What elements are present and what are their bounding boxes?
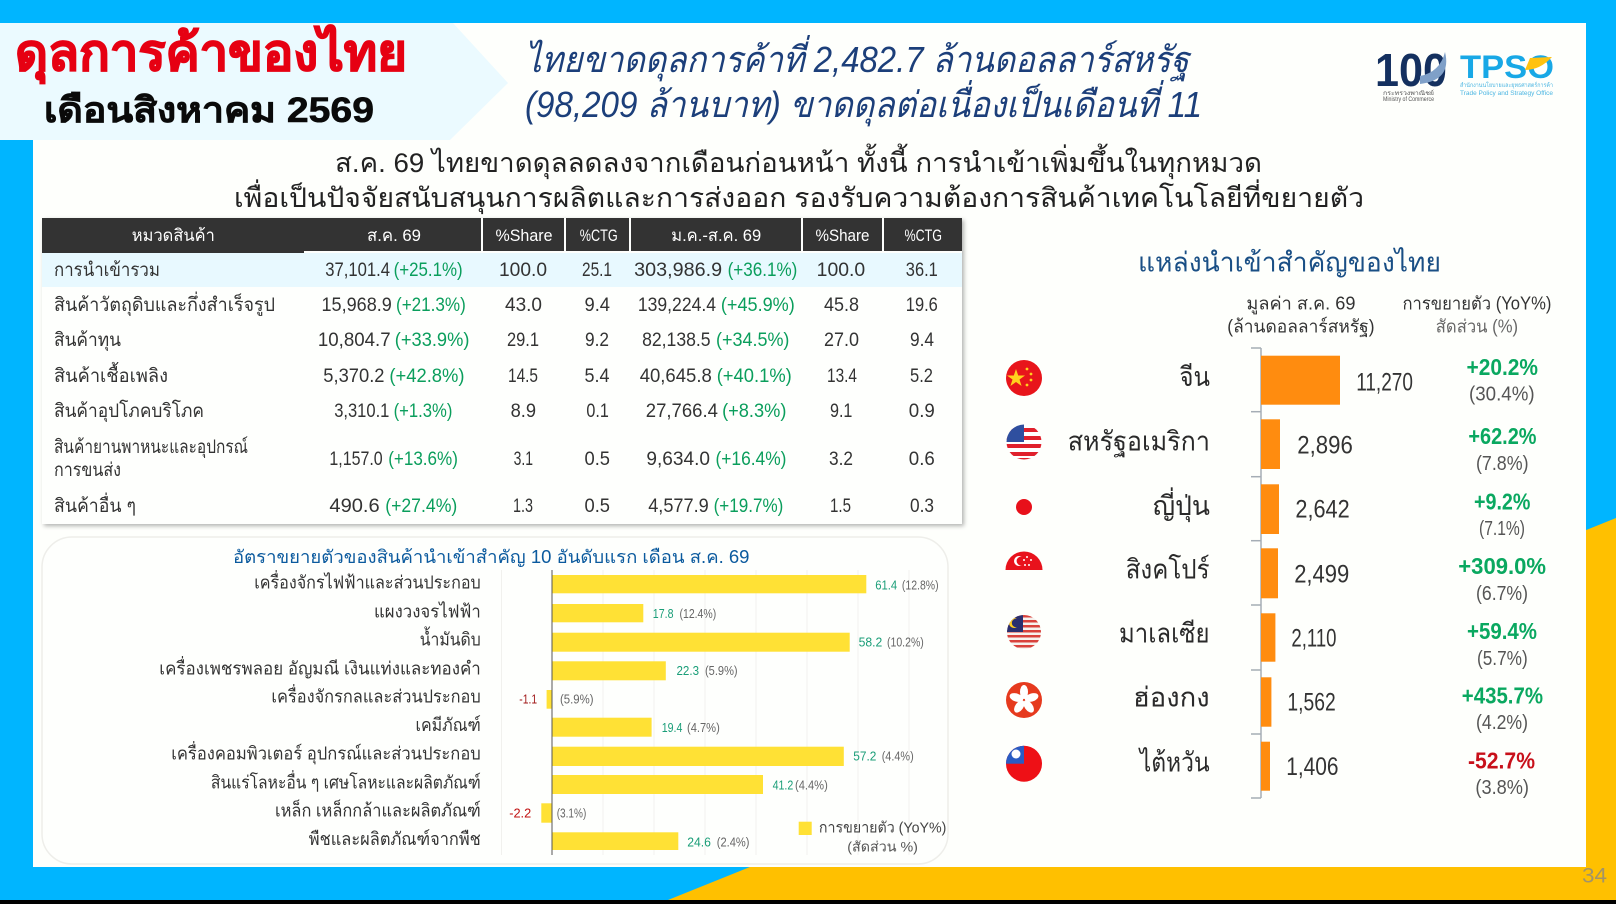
- row: total imports: 25.1: [582, 260, 612, 281]
- row: fuel: (+40.1%): [717, 366, 792, 387]
- row: consumer goods: สินค้าอุปโภคบริโภค: [54, 399, 204, 423]
- row: capital goods: 10,804.7: [318, 330, 391, 351]
- row: raw materials: สินค้าวัตถุดิบและกึ่งสำเร็จรูป: [54, 291, 275, 317]
- row: other goods: 1.3: [513, 496, 533, 517]
- row: United States: [1006, 419, 1536, 475]
- bar: metal ores and scrap: 41.2: [773, 777, 793, 792]
- row: Singapore: +309.0%: [1458, 553, 1546, 579]
- table header: %Share: [496, 226, 552, 245]
- logos: [1375, 44, 1554, 103]
- icon: China flag: [1006, 360, 1042, 396]
- row: raw materials: [54, 291, 938, 317]
- table header: %CTG: [904, 226, 942, 245]
- row: other goods: 4,577.9: [648, 496, 709, 517]
- icon: Hong Kong flag: [1006, 682, 1042, 718]
- row: capital goods: 9.4: [910, 330, 934, 351]
- row: other goods: 1.5: [830, 496, 851, 517]
- row: fuel: 14.5: [508, 366, 538, 387]
- row: Taiwan: ไต้หวัน: [1138, 748, 1210, 778]
- row: United States: (7.8%): [1476, 453, 1528, 475]
- table header: ม.ค.-ส.ค. 69: [671, 226, 761, 245]
- bar: electrical machinery: เครื่องจักรไฟฟ้าและส่วนประกอบ: [254, 569, 481, 592]
- row: consumer goods: 3,310.1: [334, 401, 389, 422]
- row: consumer goods: 27,766.4: [646, 401, 718, 422]
- table background: [42, 218, 962, 524]
- row: Taiwan: -52.7%: [1468, 747, 1535, 773]
- title: เดือนสิงหาคม 2569: [44, 91, 374, 130]
- table header: %Share: [816, 226, 870, 245]
- bar: jewellery and gold: [159, 655, 738, 680]
- bar: computers: (4.4%): [882, 749, 914, 764]
- bar: machinery: (5.9%): [560, 691, 594, 706]
- row: China: (30.4%): [1469, 384, 1535, 406]
- table header: หมวดสินค้า: [132, 226, 215, 245]
- page number: 34: [1582, 865, 1607, 888]
- row: vehicles and transport equipment: 3.1: [514, 449, 533, 470]
- chart legend: (สัดส่วน %): [847, 839, 918, 855]
- bar: machinery: [271, 684, 594, 709]
- row: capital goods: 82,138.5: [642, 330, 711, 351]
- bar: electrical machinery: 61.4: [875, 577, 897, 592]
- row: capital goods: 27.0: [824, 330, 859, 351]
- row: total imports: 37,101.4: [325, 260, 390, 281]
- row: Hong Kong: 1,562: [1287, 689, 1336, 717]
- bar: integrated circuits: (12.4%): [680, 606, 716, 621]
- row: other goods: สินค้าอื่น ๆ: [54, 492, 136, 517]
- row: capital goods: (+33.9%): [395, 330, 469, 351]
- bar: metal ores and scrap: สินแร่โลหะอื่น ๆ เศษโลหะและผลิตภัณฑ์: [211, 769, 481, 792]
- row: raw materials: 15,968.9: [322, 295, 392, 316]
- title: [15, 24, 407, 130]
- row: Japan: +9.2%: [1474, 488, 1530, 514]
- bar: computers: [171, 740, 914, 766]
- background: black bottom bar: [0, 900, 1616, 904]
- bar: machinery: เครื่องจักรกลและส่วนประกอบ: [271, 684, 481, 707]
- row: Singapore: 2,499: [1294, 561, 1349, 589]
- row: Hong Kong: [1006, 677, 1543, 734]
- row: raw materials: 43.0: [505, 295, 542, 316]
- row: Singapore: (6.7%): [1476, 583, 1528, 605]
- row: China: [1006, 354, 1538, 406]
- row: capital goods: 9.2: [585, 330, 609, 351]
- bar: integrated circuits: แผงวงจรไฟฟ้า: [374, 600, 481, 621]
- bar: chemicals: เคมีภัณฑ์: [416, 715, 481, 735]
- row: consumer goods: [54, 399, 935, 423]
- row: Singapore: [1006, 548, 1546, 605]
- headline: (98,209 ล้านบาท) ขาดดุลต่อเนื่องเป็นเดือนที่ 11: [525, 79, 1202, 127]
- row: vehicles and transport equipment: สินค้ายานพาหนะและอุปกรณ์: [54, 436, 248, 459]
- panel: import sources: [1005, 248, 1551, 799]
- row: Hong Kong: (4.2%): [1476, 712, 1528, 734]
- bar: iron and steel: เหล็ก เหล็กกล้าและผลิตภัณฑ์: [275, 799, 481, 821]
- row: fuel: [54, 362, 933, 387]
- row: consumer goods: (+8.3%): [722, 401, 786, 422]
- logo: TPSO: TPSO: [1460, 49, 1554, 85]
- row: total imports: (+25.1%): [394, 260, 463, 281]
- icon: US flag: [1006, 424, 1042, 460]
- bar: metal ores and scrap: [211, 769, 828, 794]
- logo: TPSO: สำนักงานนโยบายและยุทธศาสตร์การค้า: [1460, 81, 1553, 89]
- panel heading: แหล่งนำเข้าสำคัญของไทย: [1138, 248, 1441, 278]
- title: ดุลการค้าของไทย: [15, 24, 407, 84]
- bar: electrical machinery: [254, 569, 939, 593]
- row: Malaysia: 2,110: [1291, 625, 1336, 653]
- row: total imports: 303,986.9: [634, 260, 722, 281]
- bar: integrated circuits: [374, 600, 716, 622]
- row: consumer goods: 9.1: [830, 401, 852, 422]
- row: Japan: ญี่ปุ่น: [1153, 487, 1210, 523]
- row: raw materials: 139,224.4: [638, 295, 716, 316]
- bar: chemicals: 19.4: [662, 720, 682, 735]
- row: United States: +62.2%: [1468, 423, 1536, 449]
- row: vehicles and transport equipment: 1,157.0: [329, 449, 383, 470]
- row: total imports: 100.0: [817, 260, 865, 281]
- axis and ticks: [1251, 348, 1261, 798]
- row: total imports: การนำเข้ารวม: [54, 260, 160, 281]
- row: Japan: 2,642: [1295, 495, 1350, 523]
- row: Malaysia: +59.4%: [1467, 618, 1537, 644]
- row: fuel: สินค้าเชื้อเพลิง: [54, 362, 168, 387]
- bar: machinery: -1.1: [519, 691, 537, 706]
- row: Malaysia: (5.7%): [1477, 648, 1528, 670]
- bar: iron and steel: -2.2: [509, 806, 531, 821]
- logo: Ministry of Commerce 100: Ministry of Commerce: [1383, 97, 1435, 103]
- row: total imports: (+36.1%): [728, 260, 797, 281]
- bar: computers: เครื่องคอมพิวเตอร์ อุปกรณ์และส่วนประกอบ: [171, 740, 481, 764]
- panel: top-10 import growth chart: [42, 537, 948, 864]
- row: Taiwan: 1,406: [1286, 753, 1338, 781]
- row: Malaysia: [1006, 613, 1537, 670]
- row: fuel: 40,645.8: [640, 366, 712, 387]
- bar: crude oil: น้ำมันดิบ: [420, 627, 481, 650]
- table header: %CTG: [580, 226, 618, 245]
- logo: Ministry of Commerce 100: กระทรวงพาณิชย์: [1383, 89, 1434, 97]
- row: fuel: 5,370.2: [323, 366, 384, 387]
- bar: metal ores and scrap: (4.4%): [795, 777, 828, 792]
- row: other goods: [54, 492, 934, 517]
- row: consumer goods: 0.1: [586, 401, 609, 422]
- bar: chemicals: [416, 715, 720, 737]
- subheading: ส.ค. 69 ไทยขาดดุลลดลงจากเดือนก่อนหน้า ทั้งนี้ การนำเข้าเพิ่มขึ้นในทุกหมวด: [335, 143, 1262, 180]
- row: capital goods: [54, 330, 934, 352]
- row: other goods: 490.6: [329, 496, 380, 517]
- column heading: value: [1227, 293, 1375, 337]
- column heading: growth: [1402, 293, 1551, 336]
- row: United States: สหรัฐอเมริกา: [1068, 427, 1210, 458]
- logo: TPSO: [1460, 49, 1554, 97]
- row: capital goods: (+34.5%): [716, 330, 789, 351]
- panel: import table: [42, 218, 962, 524]
- row: vehicles and transport equipment: (+13.6%): [388, 449, 458, 470]
- bar: crude oil: [420, 627, 924, 652]
- row: vehicles and transport equipment: [54, 436, 935, 481]
- row: consumer goods: (+1.3%): [394, 401, 452, 422]
- row: other goods: (+19.7%): [714, 496, 783, 517]
- bar: iron and steel: [275, 799, 586, 823]
- row: raw materials: 9.4: [584, 295, 610, 316]
- row: other goods: (+27.4%): [385, 496, 457, 517]
- row: total imports: 100.0: [499, 260, 547, 281]
- row: vehicles and transport equipment: 0.6: [909, 449, 935, 470]
- bar: iron and steel: (3.1%): [557, 806, 586, 821]
- logo: Ministry of Commerce 100: 100: [1375, 44, 1447, 96]
- chart legend: การขยายตัว (YoY%): [819, 820, 946, 837]
- row: United States: 2,896: [1297, 431, 1353, 459]
- row: raw materials: (+21.3%): [396, 295, 466, 316]
- table header: [42, 218, 962, 253]
- row: Japan: (7.1%): [1479, 518, 1525, 540]
- column heading: growth: สัดส่วน (%): [1436, 316, 1518, 336]
- row: fuel: 13.4: [827, 366, 857, 387]
- row: fuel: 5.2: [910, 366, 933, 387]
- row: other goods: 0.5: [584, 496, 610, 517]
- row: vehicles and transport equipment: 9,634.0: [646, 449, 710, 470]
- row: vehicles and transport equipment: 3.2: [829, 449, 853, 470]
- table header: ส.ค. 69: [367, 226, 421, 245]
- row: fuel: 5.4: [584, 366, 610, 387]
- row: fuel: (+42.8%): [389, 366, 464, 387]
- bar: plants and plant products: พืชและผลิตภัณฑ์จากพืช: [309, 829, 481, 849]
- headline: [525, 34, 1202, 127]
- row: Taiwan: [1005, 742, 1535, 799]
- bar: crude oil: (10.2%): [887, 635, 924, 650]
- bar: plants and plant products: (2.4%): [717, 835, 750, 850]
- row: Taiwan: (3.8%): [1475, 777, 1529, 799]
- icon: Japan flag: [1016, 499, 1032, 515]
- bar: computers: 57.2: [853, 749, 876, 764]
- title banner shape: [0, 23, 508, 140]
- chart title: อัตราขยายตัวของสินค้านำเข้าสำคัญ 10 อันดับแรก เดือน ส.ค. 69: [233, 547, 750, 567]
- bar: jewellery and gold: (5.9%): [705, 663, 738, 678]
- bar: plants and plant products: 24.6: [687, 835, 711, 850]
- row: total imports: [42, 253, 962, 287]
- row: raw materials: (+45.9%): [721, 295, 795, 316]
- logo: TPSO: Trade Policy and Strategy Office: [1460, 91, 1554, 97]
- background: yellow corner: [668, 518, 1616, 900]
- row: vehicles and transport equipment: การขนส่ง: [54, 460, 121, 481]
- bar: chemicals: (4.7%): [687, 720, 720, 735]
- subheading: [234, 143, 1364, 215]
- bar: jewellery and gold: เครื่องเพชรพลอย อัญมณี เงินแท่งและทองคำ: [159, 655, 481, 678]
- row: consumer goods: 8.9: [511, 401, 536, 422]
- bar: integrated circuits: 17.8: [653, 606, 674, 621]
- bar: crude oil: 58.2: [859, 635, 882, 650]
- headline: ไทยขาดดุลการค้าที่ 2,482.7 ล้านดอลลาร์สหรัฐ: [525, 34, 1192, 82]
- row: Hong Kong: +435.7%: [1462, 682, 1543, 708]
- row: China: จีน: [1179, 362, 1210, 392]
- bar: plants and plant products: [309, 829, 750, 850]
- column heading: value: มูลค่า ส.ค. 69: [1246, 293, 1356, 314]
- icon: Singapore flag: [1006, 552, 1042, 570]
- row: China: 11,270: [1356, 369, 1413, 397]
- bar: electrical machinery: (12.8%): [902, 577, 939, 592]
- chart axis: [551, 570, 553, 855]
- row: Hong Kong: ฮ่องกง: [1133, 683, 1210, 713]
- row: capital goods: 29.1: [507, 330, 539, 351]
- row: other goods: 0.3: [910, 496, 934, 517]
- row: raw materials: 45.8: [824, 295, 859, 316]
- column heading: growth: การขยายตัว (YoY%): [1402, 293, 1551, 313]
- row: Japan: [1016, 484, 1530, 540]
- column heading: value: (ล้านดอลลาร์สหรัฐ): [1227, 316, 1375, 337]
- subheading: เพื่อเป็นปัจจัยสนับสนุนการผลิตและการส่งออก รองรับความต้องการสินค้าเทคโนโลยีที่ขยายตัว: [234, 179, 1364, 215]
- bar: jewellery and gold: 22.3: [676, 663, 699, 678]
- row: China: +20.2%: [1466, 354, 1538, 380]
- icon: Malaysia flag: [1007, 615, 1041, 649]
- icon: Taiwan flag: [1005, 745, 1043, 783]
- row: Malaysia: มาเลเซีย: [1119, 619, 1210, 649]
- chart legend: [799, 820, 946, 855]
- row: vehicles and transport equipment: 0.5: [584, 449, 610, 470]
- row: raw materials: 19.6: [906, 295, 938, 316]
- row: Singapore: สิงคโปร์: [1126, 553, 1210, 584]
- row: consumer goods: 0.9: [909, 401, 935, 422]
- row: total imports: 36.1: [906, 260, 938, 281]
- row: vehicles and transport equipment: (+16.4%): [716, 449, 786, 470]
- row: capital goods: สินค้าทุน: [54, 330, 121, 352]
